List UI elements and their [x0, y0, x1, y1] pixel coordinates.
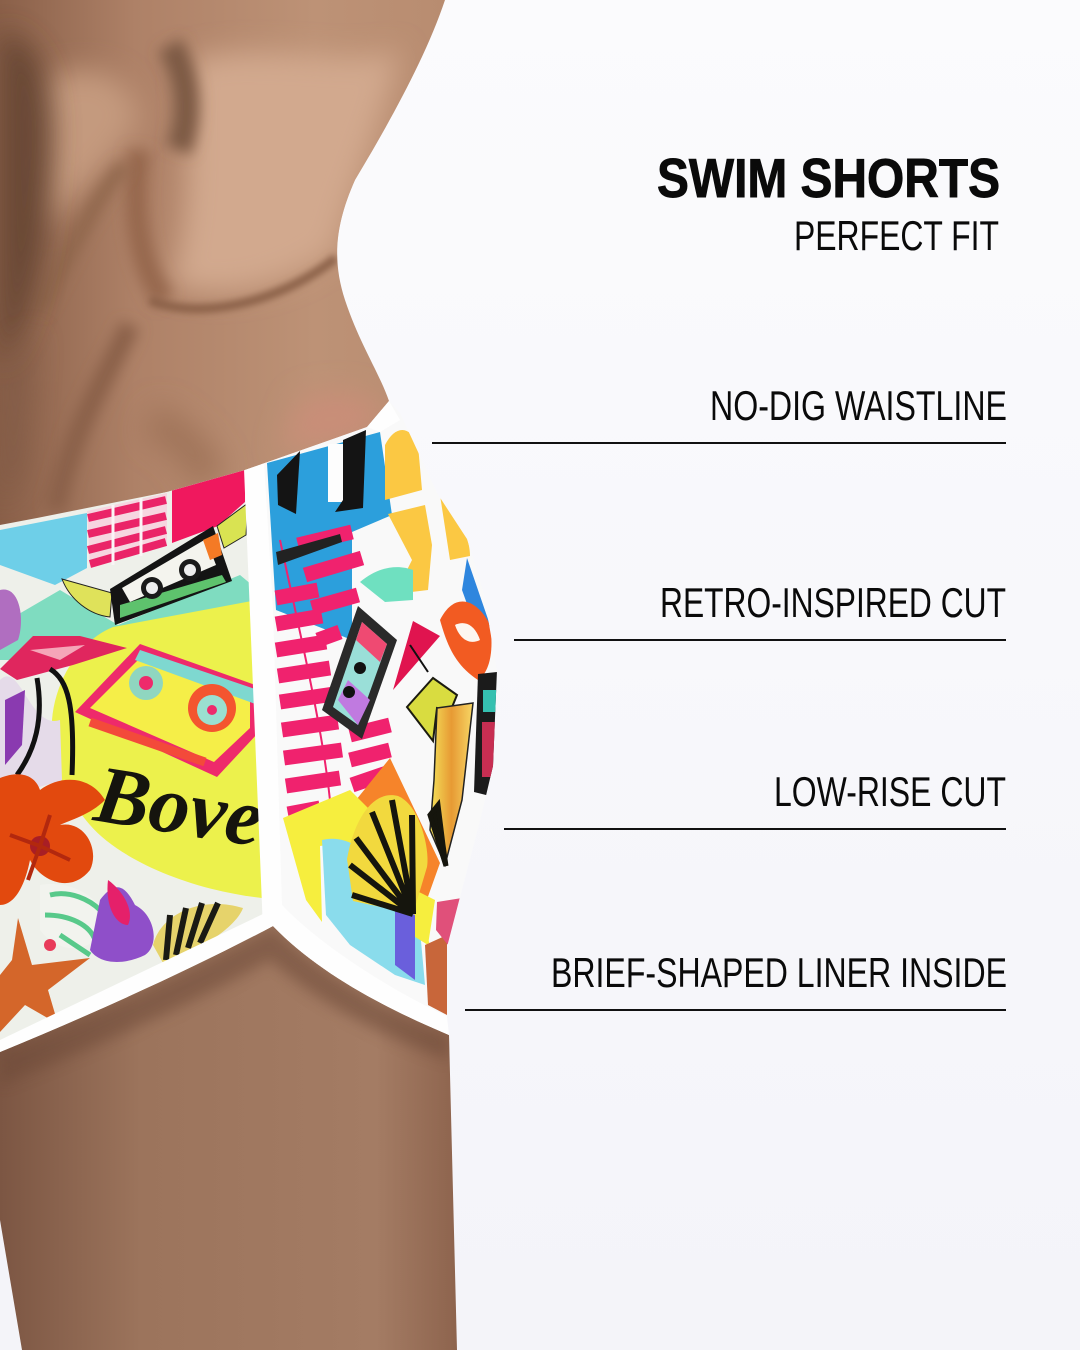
- blue streak: [462, 558, 490, 626]
- kiss lips: [440, 601, 492, 680]
- light blue sky patch: [0, 513, 87, 585]
- black guitar detail: [276, 534, 342, 565]
- yellow shapes: [385, 430, 422, 500]
- cocktail umbrella: [393, 621, 440, 690]
- flower foliage: [44, 891, 99, 958]
- orange wash: [358, 758, 440, 896]
- blue watercolour: [322, 839, 425, 985]
- yellow splash under shell: [415, 892, 435, 944]
- torso: [0, 0, 450, 540]
- pink and purple blob: [90, 887, 154, 962]
- ladder stripes: [274, 524, 392, 816]
- yellow circle: [52, 600, 262, 898]
- side panel print: [262, 400, 502, 1040]
- starfish: [0, 918, 90, 1032]
- pink grid pattern: [87, 493, 167, 568]
- boombox edge: [474, 672, 497, 796]
- pineapple slice: [407, 678, 457, 741]
- yellow wash: [283, 790, 430, 945]
- scallop shell, side: [347, 795, 428, 914]
- pink flower: [436, 898, 462, 945]
- white side piping and hem: [0, 401, 449, 1052]
- front panel print: [0, 460, 270, 1060]
- pink cassette: [75, 644, 258, 777]
- thigh: [0, 920, 470, 1350]
- mint wash: [0, 575, 258, 660]
- flamingo: [0, 590, 127, 800]
- blue panel: [267, 432, 392, 640]
- script lettering: Bove: [88, 748, 269, 864]
- green cassette with wings: [62, 503, 248, 625]
- subtitle: perfect fit: PERFECT FIT: [794, 212, 999, 259]
- scallop shell, front: [153, 903, 243, 963]
- cocktail glass: [430, 703, 473, 866]
- purple streak: [395, 905, 415, 980]
- lower right starfish: [425, 935, 447, 1015]
- pink block at waistband: [172, 470, 245, 543]
- hibiscus flower: [0, 774, 105, 905]
- title: swim shorts: SWIM SHORTS: [657, 147, 1000, 209]
- swim shorts: [0, 400, 502, 1060]
- small cassette: [322, 606, 397, 739]
- mint blob: [360, 567, 413, 602]
- callout: low-rise cut: LOW-RISE CUT: [774, 768, 1006, 815]
- figure legs: [277, 451, 300, 514]
